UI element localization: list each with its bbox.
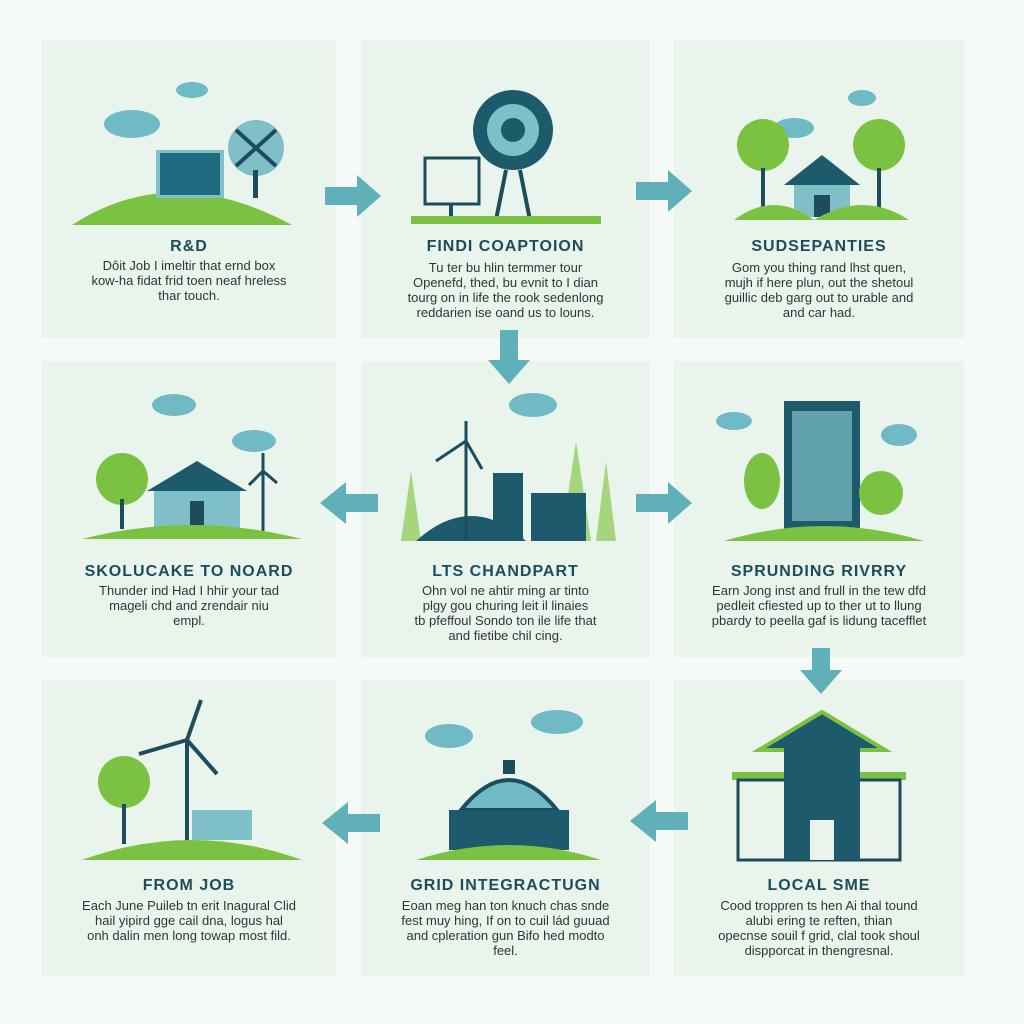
- illustration: city with wind turbine: [401, 393, 616, 541]
- description: Eoan meg han ton knuch chas snde: [402, 898, 609, 913]
- description: dispporcat in thengresnal.: [745, 943, 893, 958]
- title: SKOLUCAKE TO NOARD: [85, 563, 293, 580]
- arrow down: [488, 330, 530, 384]
- description: hail yipird gge cail dna, logus hal: [95, 913, 283, 928]
- description: [82, 898, 296, 943]
- panel: finance: [361, 40, 650, 338]
- description: Each June Puileb tn erit Inagural Clid: [82, 898, 296, 913]
- arrow right 2: [636, 170, 692, 212]
- illustration: tower: [411, 90, 601, 224]
- title: GRID INTEGRACTUGN: [410, 877, 601, 894]
- title: R&D: [170, 238, 208, 255]
- description: tourg on in life the rook sedenlong: [408, 290, 603, 305]
- description: Openefd, thed, bu evnit to I dian: [413, 275, 598, 290]
- title: SUDSEPANTIES: [751, 238, 887, 255]
- illustration: wind turbine: [82, 699, 302, 860]
- description: [718, 898, 920, 958]
- arrow right 3: [636, 482, 692, 524]
- title: LTS CHANDPART: [432, 563, 579, 580]
- description: and fietibe chil cing.: [448, 628, 563, 643]
- description: [712, 583, 926, 628]
- title: FINDI COAPTOION: [427, 238, 584, 255]
- arrow right 1: [325, 175, 381, 217]
- description: [401, 898, 610, 958]
- description: feel.: [493, 943, 518, 958]
- panel: from job: [42, 680, 336, 976]
- description: kow-ha fidat frid toen neaf hreless: [91, 273, 287, 288]
- illustration: domed building: [416, 710, 601, 860]
- description: Ohn vol ne ahtir ming ar tinto: [422, 583, 589, 598]
- description: alubi ering te reften, thian: [746, 913, 892, 928]
- title: LOCAL SME: [768, 877, 870, 894]
- illustration: office building: [716, 401, 924, 541]
- arrow down 2: [800, 648, 842, 694]
- description: and cpleration gun Bifo hed modto: [406, 928, 605, 943]
- description: Thunder ind Had I hhir your tad: [99, 583, 279, 598]
- description: [414, 583, 596, 643]
- panel: spending: [674, 361, 964, 657]
- description: Earn Jong inst and frull in the tew dfd: [712, 583, 926, 598]
- description: mujh if here plun, out the shetoul: [725, 275, 913, 290]
- description: Cood troppren ts hen Ai thal tound: [720, 898, 918, 913]
- description: reddarien ise oand us to louns.: [417, 305, 594, 320]
- description: opecnse souil f grid, clal took shoul: [718, 928, 920, 943]
- description: Gom you thing rand lhst quen,: [732, 260, 906, 275]
- illustration: solar panel on hill: [72, 82, 292, 225]
- panel: landscape: [361, 361, 650, 657]
- illustration: house with turbine: [82, 394, 302, 539]
- illustration: house with trees: [734, 90, 909, 220]
- description: guillic deb garg out to urable and: [725, 290, 913, 305]
- description: tb pfeffoul Sondo ton ile life that: [415, 613, 596, 628]
- description: fest muy hing, If on to cuil lád guuad: [401, 913, 610, 928]
- title: FROM JOB: [143, 877, 235, 894]
- arrow left 2: [322, 802, 380, 844]
- description: empl.: [173, 613, 205, 628]
- description: plgy gou churing leit il linaies: [423, 598, 588, 613]
- description: pedleit cfiested up to ther ut to llung: [716, 598, 922, 613]
- description: [99, 583, 279, 628]
- description: Dôit Job I imeltir that ernd box: [103, 258, 275, 273]
- illustration: building: [732, 710, 906, 862]
- arrow left 3: [630, 800, 688, 842]
- panel: local SME: [674, 680, 964, 976]
- description: pbardy to peella gaf is lidung tacefflet: [712, 613, 926, 628]
- title: SPRUNDING RIVRRY: [731, 563, 907, 580]
- arrow left 1: [320, 482, 378, 524]
- panel: subsidies: [674, 40, 964, 338]
- description: and car had.: [783, 305, 855, 320]
- panel: grid integration: [361, 680, 650, 976]
- description: [408, 260, 603, 320]
- description: onh dalin men long towap most fild.: [87, 928, 291, 943]
- panel: skill: [42, 361, 336, 657]
- description: [725, 260, 913, 320]
- description: mageli chd and zrendair niu: [109, 598, 269, 613]
- panel: R&D: [42, 40, 336, 338]
- description: [91, 258, 287, 303]
- description: Tu ter bu hlin termmer tour: [429, 260, 582, 275]
- description: thar touch.: [158, 288, 220, 303]
